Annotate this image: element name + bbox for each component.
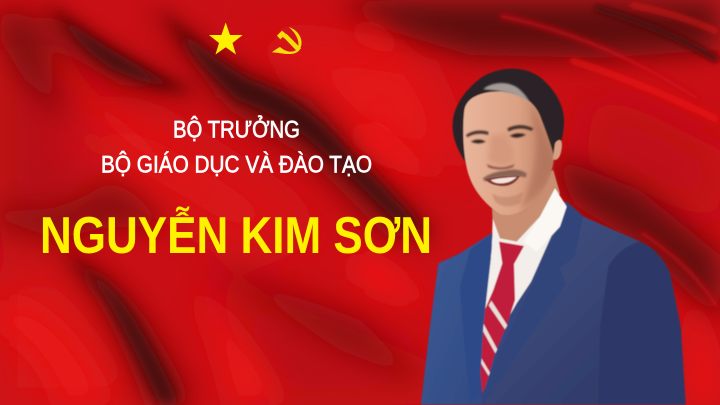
suit back fill [421, 202, 686, 405]
face [463, 92, 554, 215]
grey hair streak [483, 83, 530, 103]
neck [492, 170, 560, 247]
title: name: NGUYỄN KIM SƠN [40, 206, 432, 265]
suit right side [482, 202, 686, 405]
subtitle: minister: BỘ TRƯỞNG [173, 114, 300, 144]
moustache [483, 169, 527, 182]
icon: hammer and sickle [272, 27, 302, 54]
hair backing [453, 69, 564, 162]
eyebrows [466, 125, 533, 137]
shirt [483, 188, 567, 327]
teeth [491, 177, 517, 183]
mouth [485, 176, 520, 186]
nose [488, 133, 515, 165]
portrait [421, 69, 686, 405]
eyes [471, 133, 526, 143]
sleeve [598, 242, 686, 405]
chin shadow [492, 192, 523, 206]
face shading [520, 103, 552, 210]
nostril shadow [487, 164, 515, 169]
tie [479, 242, 524, 397]
collar right [523, 188, 567, 252]
left lapel [460, 234, 492, 405]
suit left side [421, 233, 493, 405]
icon: yellow star [209, 22, 243, 54]
ear [553, 140, 562, 160]
lapel [482, 202, 583, 405]
subtitle: ministry: BỘ GIÁO DỤC VÀ ĐÀO TẠO [101, 151, 372, 179]
